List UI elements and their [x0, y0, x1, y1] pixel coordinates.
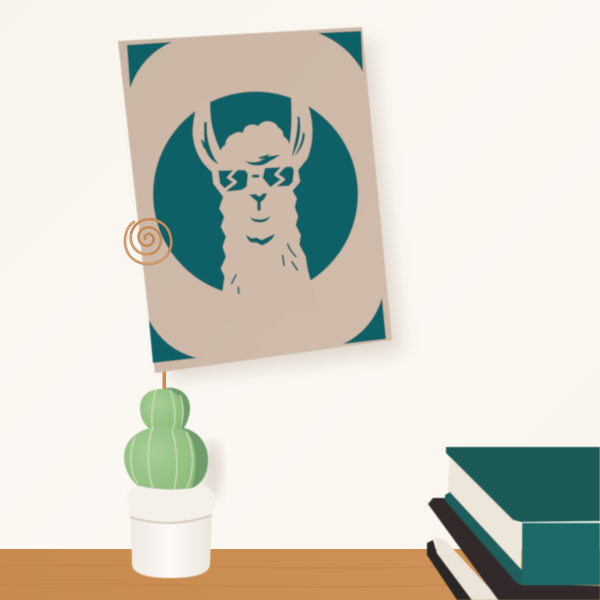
- wooden shelf: [0, 549, 600, 600]
- hair tuft: [245, 154, 281, 166]
- teal corner: bottom left: [149, 320, 197, 363]
- nose: [249, 193, 267, 211]
- pot body: [131, 515, 212, 578]
- card shadow on wall: [135, 40, 402, 380]
- chin fur: [246, 234, 275, 245]
- top book spine: [522, 523, 600, 585]
- greeting card: [118, 27, 392, 373]
- mouth: [250, 216, 270, 222]
- llama silhouette: [193, 95, 317, 307]
- teal circle: [153, 92, 358, 296]
- dark book cover: [428, 498, 600, 600]
- cactus darker back ribs: [165, 388, 208, 491]
- cactus shadow: [202, 440, 222, 500]
- neck fur marks left: [232, 275, 239, 293]
- sunglasses left reflection: [224, 169, 237, 191]
- sunglasses right reflection: [272, 166, 284, 188]
- lowest book cover: [427, 540, 473, 600]
- teal corner: bottom right: [343, 298, 386, 344]
- left ear slits: [201, 122, 218, 164]
- right ear slits: [292, 116, 305, 157]
- teal corner: top right: [318, 31, 363, 72]
- llama illustration: [193, 95, 317, 307]
- card body: [118, 27, 392, 373]
- glasses bridge: [252, 175, 259, 178]
- pot rim shadow line: [130, 515, 212, 523]
- cactus bottom ball: [124, 426, 196, 491]
- pot rim: [127, 486, 215, 523]
- cactus ornament: [124, 388, 222, 500]
- top book front cover: [446, 447, 600, 522]
- stack of books: [427, 447, 600, 600]
- spiral wire clip: [125, 219, 171, 264]
- wire stem: [162, 370, 166, 392]
- lower book pages: [435, 537, 500, 600]
- white pot: [127, 486, 215, 578]
- top book pages: [448, 453, 522, 570]
- teal corner: top left: [127, 42, 172, 88]
- neck fur marks right: [283, 244, 297, 270]
- sunglasses left lens: [218, 170, 248, 191]
- cactus ribs: [131, 390, 192, 490]
- cactus top ball: [140, 389, 183, 429]
- top book lower cover: [445, 492, 522, 585]
- sunglasses right lens: [263, 167, 294, 187]
